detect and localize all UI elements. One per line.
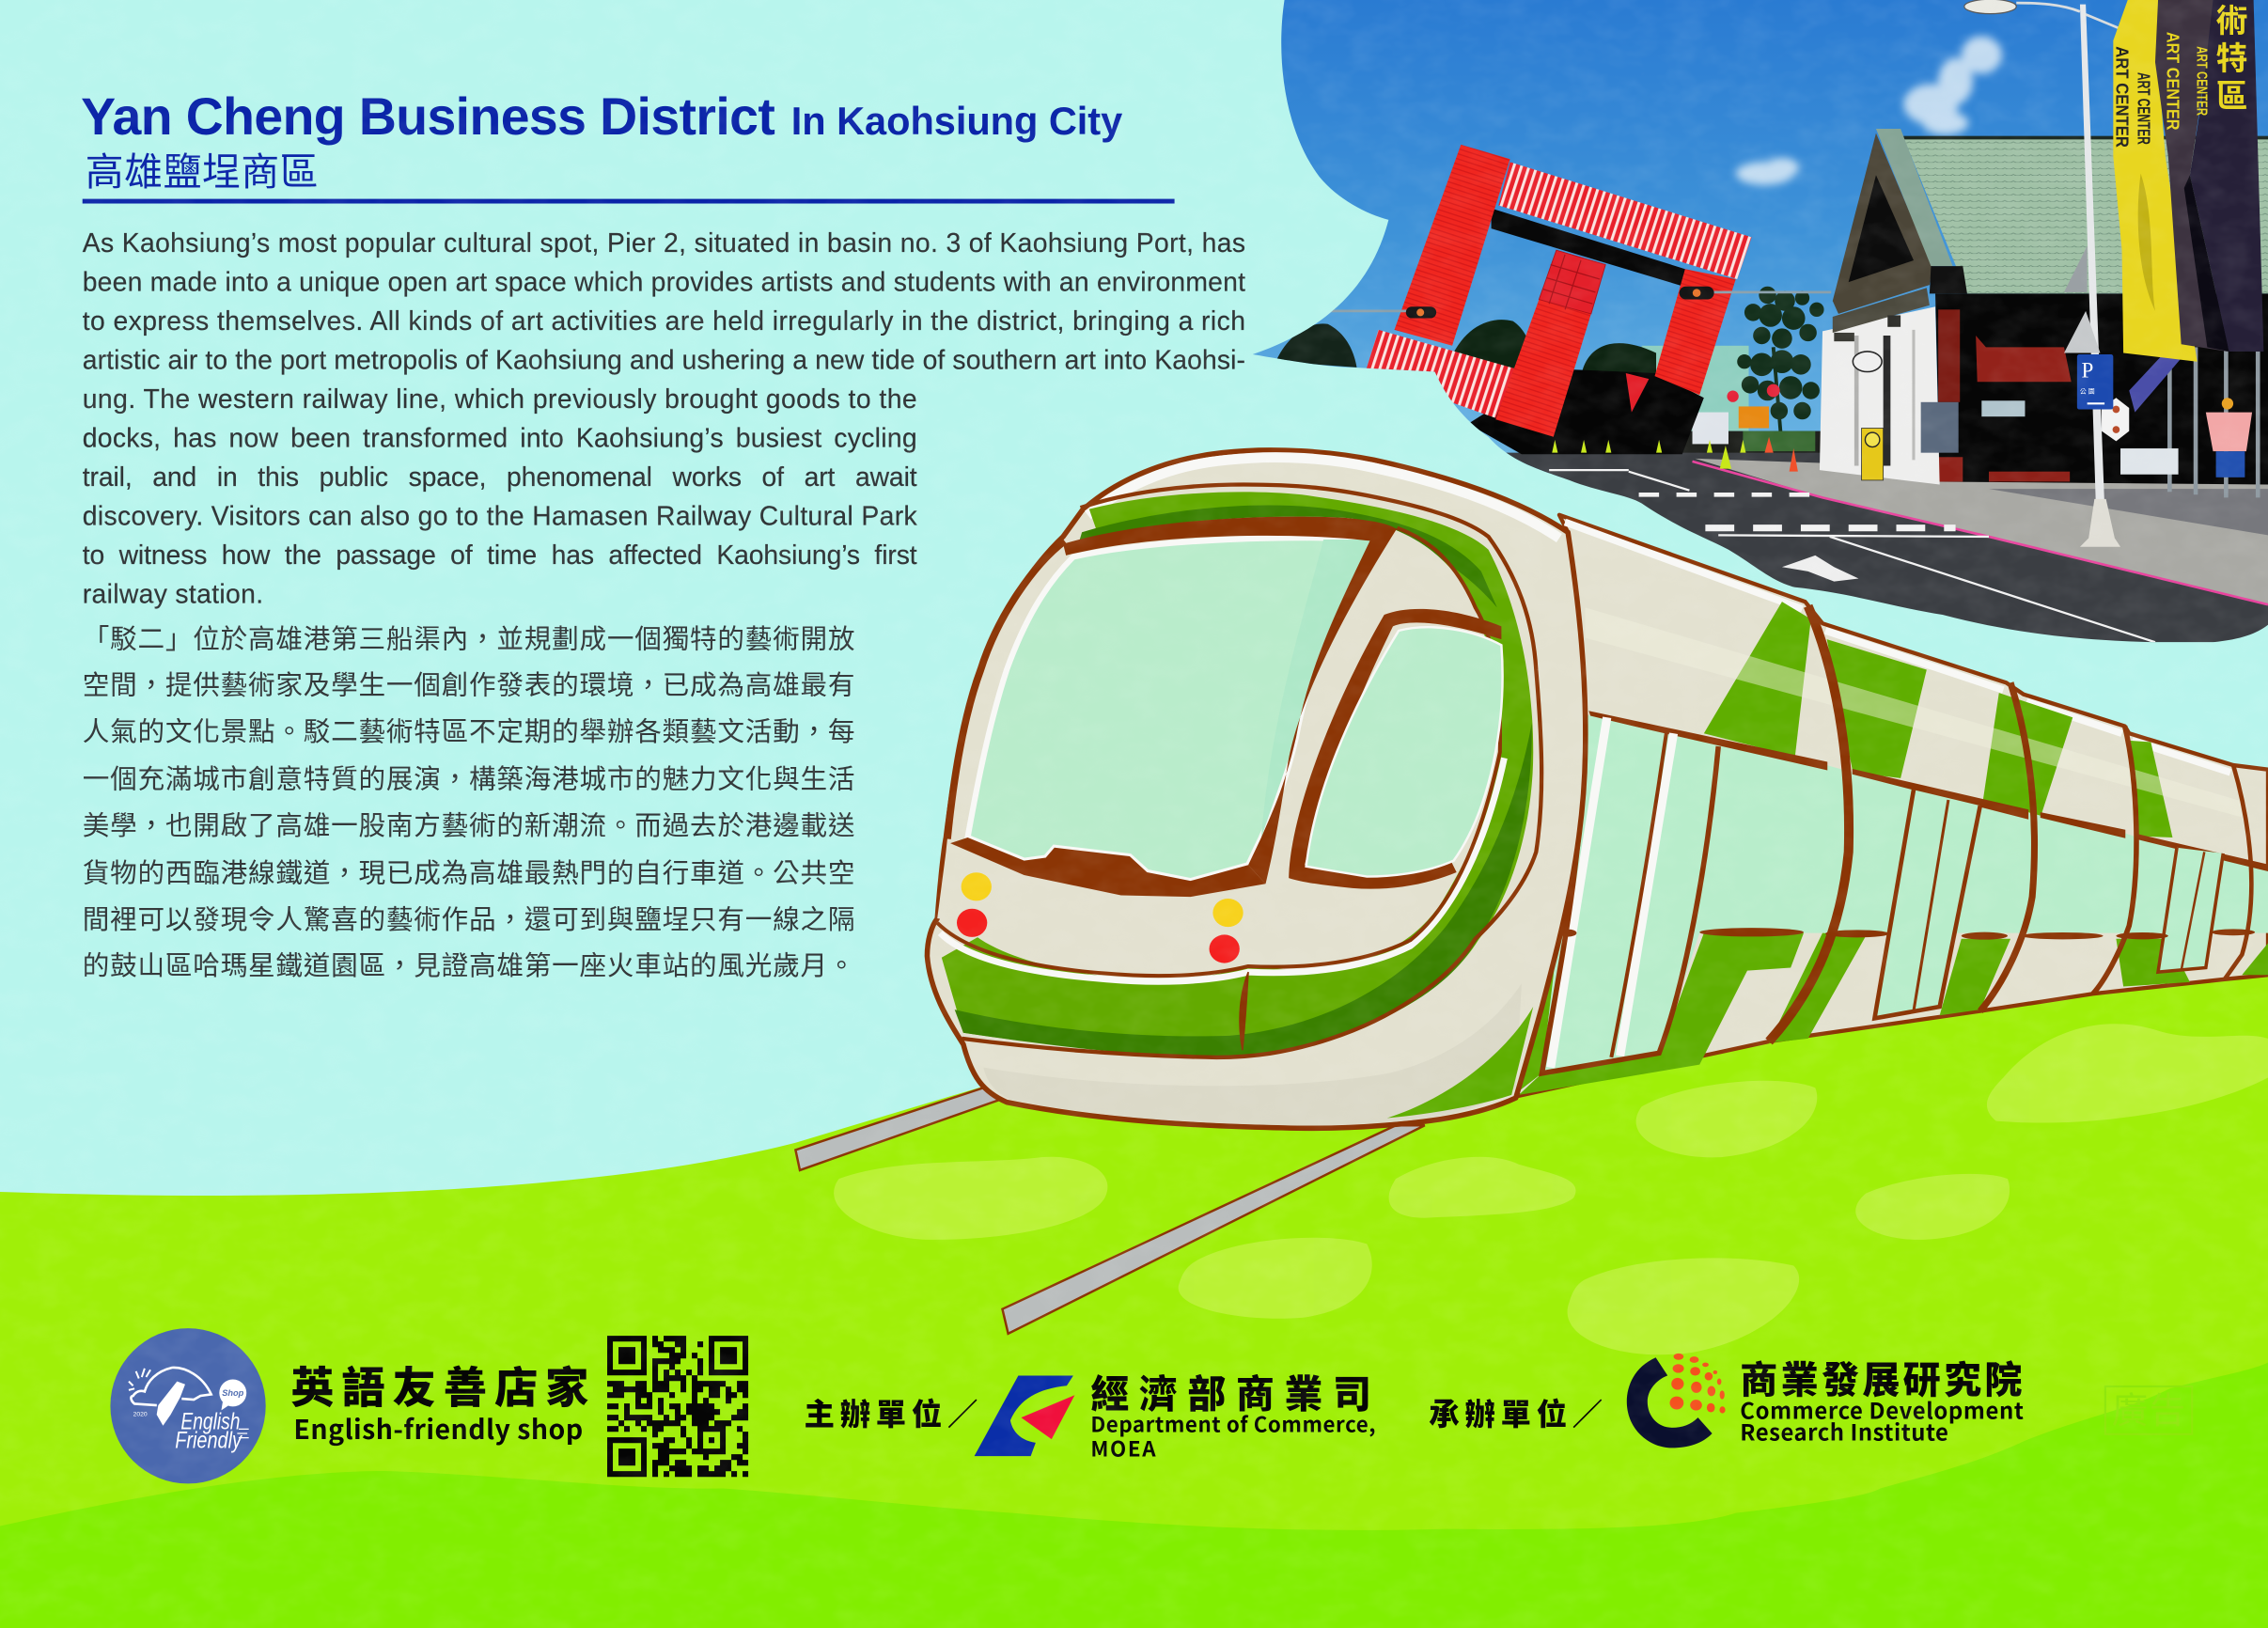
text block: Chinese description: 的鼓山區哈瑪星鐵道園區，見證高雄第一座火車站的風光歲月。 [83, 945, 854, 983]
icon: English Friendly round badge: Friendly [175, 1428, 242, 1453]
text: Department of Commerce: 經濟部商業司 [1090, 1363, 1371, 1418]
heading: Chinese title: 高雄鹽埕商區 [86, 150, 319, 194]
pale grass patches [834, 1024, 2268, 1354]
text: Commerce Development Research Institute: Research Institute [1740, 1415, 1948, 1448]
text: organizer label: 主辦單位／ [805, 1391, 978, 1434]
photo: road and sidewalk [1504, 453, 2268, 650]
photo: traffic lights [1331, 287, 1831, 319]
text: Commerce Development Research Institute [1740, 1350, 2024, 1448]
text: Commerce Development Research Institute: 商業發展研究院 [1740, 1350, 2022, 1404]
text block: English description: docks, has now been transformed into Kaohsiung’s busiest cycling [83, 423, 917, 453]
train: lower cab shading [983, 983, 1522, 1125]
train: thin brown arch line [962, 485, 1541, 1057]
text: Department of Commerce: MOEA [1090, 1433, 1156, 1464]
darker green lower band [0, 1363, 2268, 1628]
text block: Chinese description: 一個充滿城市創意特質的展演，構築海港城市的魅力文化與生活 [83, 759, 854, 797]
train: rear carriages body [1516, 515, 2268, 1096]
heading: English title: Yan Cheng Business District [81, 87, 775, 146]
icon: Commerce Development Research Institute logo [1627, 1354, 1726, 1448]
photo: art center banners: 術 [2216, 4, 2247, 39]
train: door 1 [1541, 714, 1718, 1073]
panel: photo of Pier 2 in a speech-bubble shape [1243, 0, 2268, 650]
text: English-friendly shop label [290, 1354, 588, 1448]
train: windshield shading [1261, 540, 1371, 837]
text: Commerce Development Research Institute: Commerce Development [1740, 1393, 2024, 1426]
text block: Chinese description: 人氣的文化景點。駁二藝術特區不定期的舉辦各類藝文活動，每 [83, 711, 854, 749]
train: translucent light stripe [1586, 607, 2242, 817]
rail tracks [795, 1088, 1425, 1334]
title [81, 87, 1175, 204]
text: executor label: 承辦單位／ [1429, 1391, 1603, 1434]
photo: art center banners [2112, 0, 2263, 362]
text block: English description [83, 227, 1245, 609]
heading underline [83, 199, 1175, 204]
icon: MOEA logo [975, 1375, 1074, 1456]
text block: English description: ung. The western railway line, which previously brought goods to the [83, 384, 917, 414]
train: carriage dividers [1769, 606, 2251, 1041]
train: white top rim [1087, 458, 1559, 538]
train: inner front face [937, 517, 1498, 979]
photo: red container sculpture [1366, 145, 1752, 437]
text block: English description: trail, and in this public space, phenomenal works of art await [83, 462, 917, 492]
icon: English Friendly round badge [110, 1328, 266, 1483]
photo: art center banners: 區 [2216, 79, 2247, 115]
text block: Chinese description: 空間，提供藝術家及學生一個創作發表的環境，已成為高雄最有 [83, 665, 854, 703]
photo: art center banners: ART CENTER [2134, 72, 2153, 145]
train: seal marks at window bottom [1559, 928, 2255, 940]
text block: English description: been made into a unique open art space which provides artists and students with an environment [83, 266, 1245, 296]
train: windshield pillar [1248, 528, 1398, 884]
photo: clouds [1736, 36, 2002, 185]
photo: sky [1243, 0, 2268, 477]
train illustration [927, 450, 2268, 1128]
text block: English description: to witness how the passage of time has affected Kaohsiung’s first [83, 540, 917, 570]
train: roof bar of frame [1063, 517, 1398, 556]
train: white roof highlights [1565, 523, 2230, 773]
photo: art center banners: ART CENTER [2194, 46, 2210, 116]
train: side windows band [1568, 714, 2268, 933]
text block: Chinese description: 「駁二」位於高雄港第三船渠內，並規劃成一個獨特的藝術開放 [83, 618, 854, 656]
train: green lower panels [1516, 933, 2268, 1095]
green ground [0, 972, 2268, 1628]
train: green livery band [942, 492, 1533, 1057]
photo: traffic cones [1552, 437, 1798, 472]
text: Department of Commerce: Department of Commerce, [1090, 1408, 1375, 1438]
photo: blue parking sign: 公 園 [2080, 388, 2095, 396]
text: English-friendly shop label: English-friendly shop [293, 1409, 583, 1448]
photo: flag poles and statue [2102, 347, 2258, 497]
train: door 3 [2158, 848, 2223, 972]
train: white edge under face [940, 758, 1504, 981]
train: left windshield edge [947, 541, 1065, 839]
advertisement mark: 廣告 [2112, 1382, 2185, 1434]
text block: Chinese description: 美學，也開啟了高雄一股南方藝術的新潮流。而過去於港邊載送 [83, 805, 854, 843]
train: brown edge of face [937, 528, 1500, 976]
text block: Chinese description [83, 618, 854, 983]
train: green upper panels [1704, 602, 2172, 837]
photo: street lamp pole [1964, 0, 2128, 547]
text: English-friendly shop label: 英語友善店家 [290, 1354, 588, 1417]
train: side window frame [1289, 609, 1501, 889]
icon: English Friendly round badge: 2020 [133, 1412, 148, 1418]
train: door 2 [1874, 790, 1980, 1018]
heading: English subtitle: In Kaohsiung City [791, 99, 1122, 143]
text block: English description: As Kaohsiung’s most popular cultural spot, Pier 2, situated in basin no. 3 of Kaohsiung Port, has [83, 227, 1245, 258]
train: window upper brown line [1589, 712, 2268, 870]
photo: art center banners: 特 [2216, 41, 2247, 77]
train: dark green band shading [955, 506, 1532, 1057]
text block: Chinese description: 間裡可以發現令人驚喜的藝術作品，還可到與鹽埕只有一線之隔 [83, 899, 854, 937]
QR code [607, 1338, 748, 1474]
photo: art center banners: ART CENTER [2112, 46, 2132, 148]
photo: art center banners: ART CENTER [2163, 32, 2182, 130]
train: green corner at cab bottom [1387, 1007, 1533, 1119]
train: nose divider [1240, 972, 1248, 1050]
train: side window glass [1306, 627, 1503, 877]
train: windshield [968, 538, 1371, 881]
icon: English Friendly round badge: English [180, 1409, 240, 1434]
text block: Chinese description: 貨物的西臨港線鐵道，現已成為高雄最熱門的自行車道。公共空 [83, 853, 854, 891]
train: front cab body [927, 450, 1586, 1128]
text block: English description: artistic air to the port metropolis of Kaohsiung and ushering a new tide of southern art into Kaohsi- [83, 344, 1245, 374]
text block: English description: discovery. Visitors can also go to the Hamasen Railway Cultural Park [83, 501, 918, 531]
train: lights [957, 872, 1243, 963]
photo: blue parking sign: P [2081, 358, 2093, 383]
photo: shadow mass under the sculpture [1468, 368, 1704, 454]
text: Department of Commerce [1090, 1363, 1375, 1464]
photo: brick building [1820, 129, 2268, 485]
text block: English description: to express themselves. All kinds of art activities are held irregularly in the district, bringing a rich [83, 305, 1245, 336]
train: bottom frame of windshield [950, 837, 1266, 897]
text block: English description: railway station. [83, 579, 263, 609]
photo: trees and background [1275, 287, 1830, 457]
photo: blue parking sign [2077, 354, 2113, 410]
icon: English Friendly round badge: Shop [222, 1388, 244, 1398]
